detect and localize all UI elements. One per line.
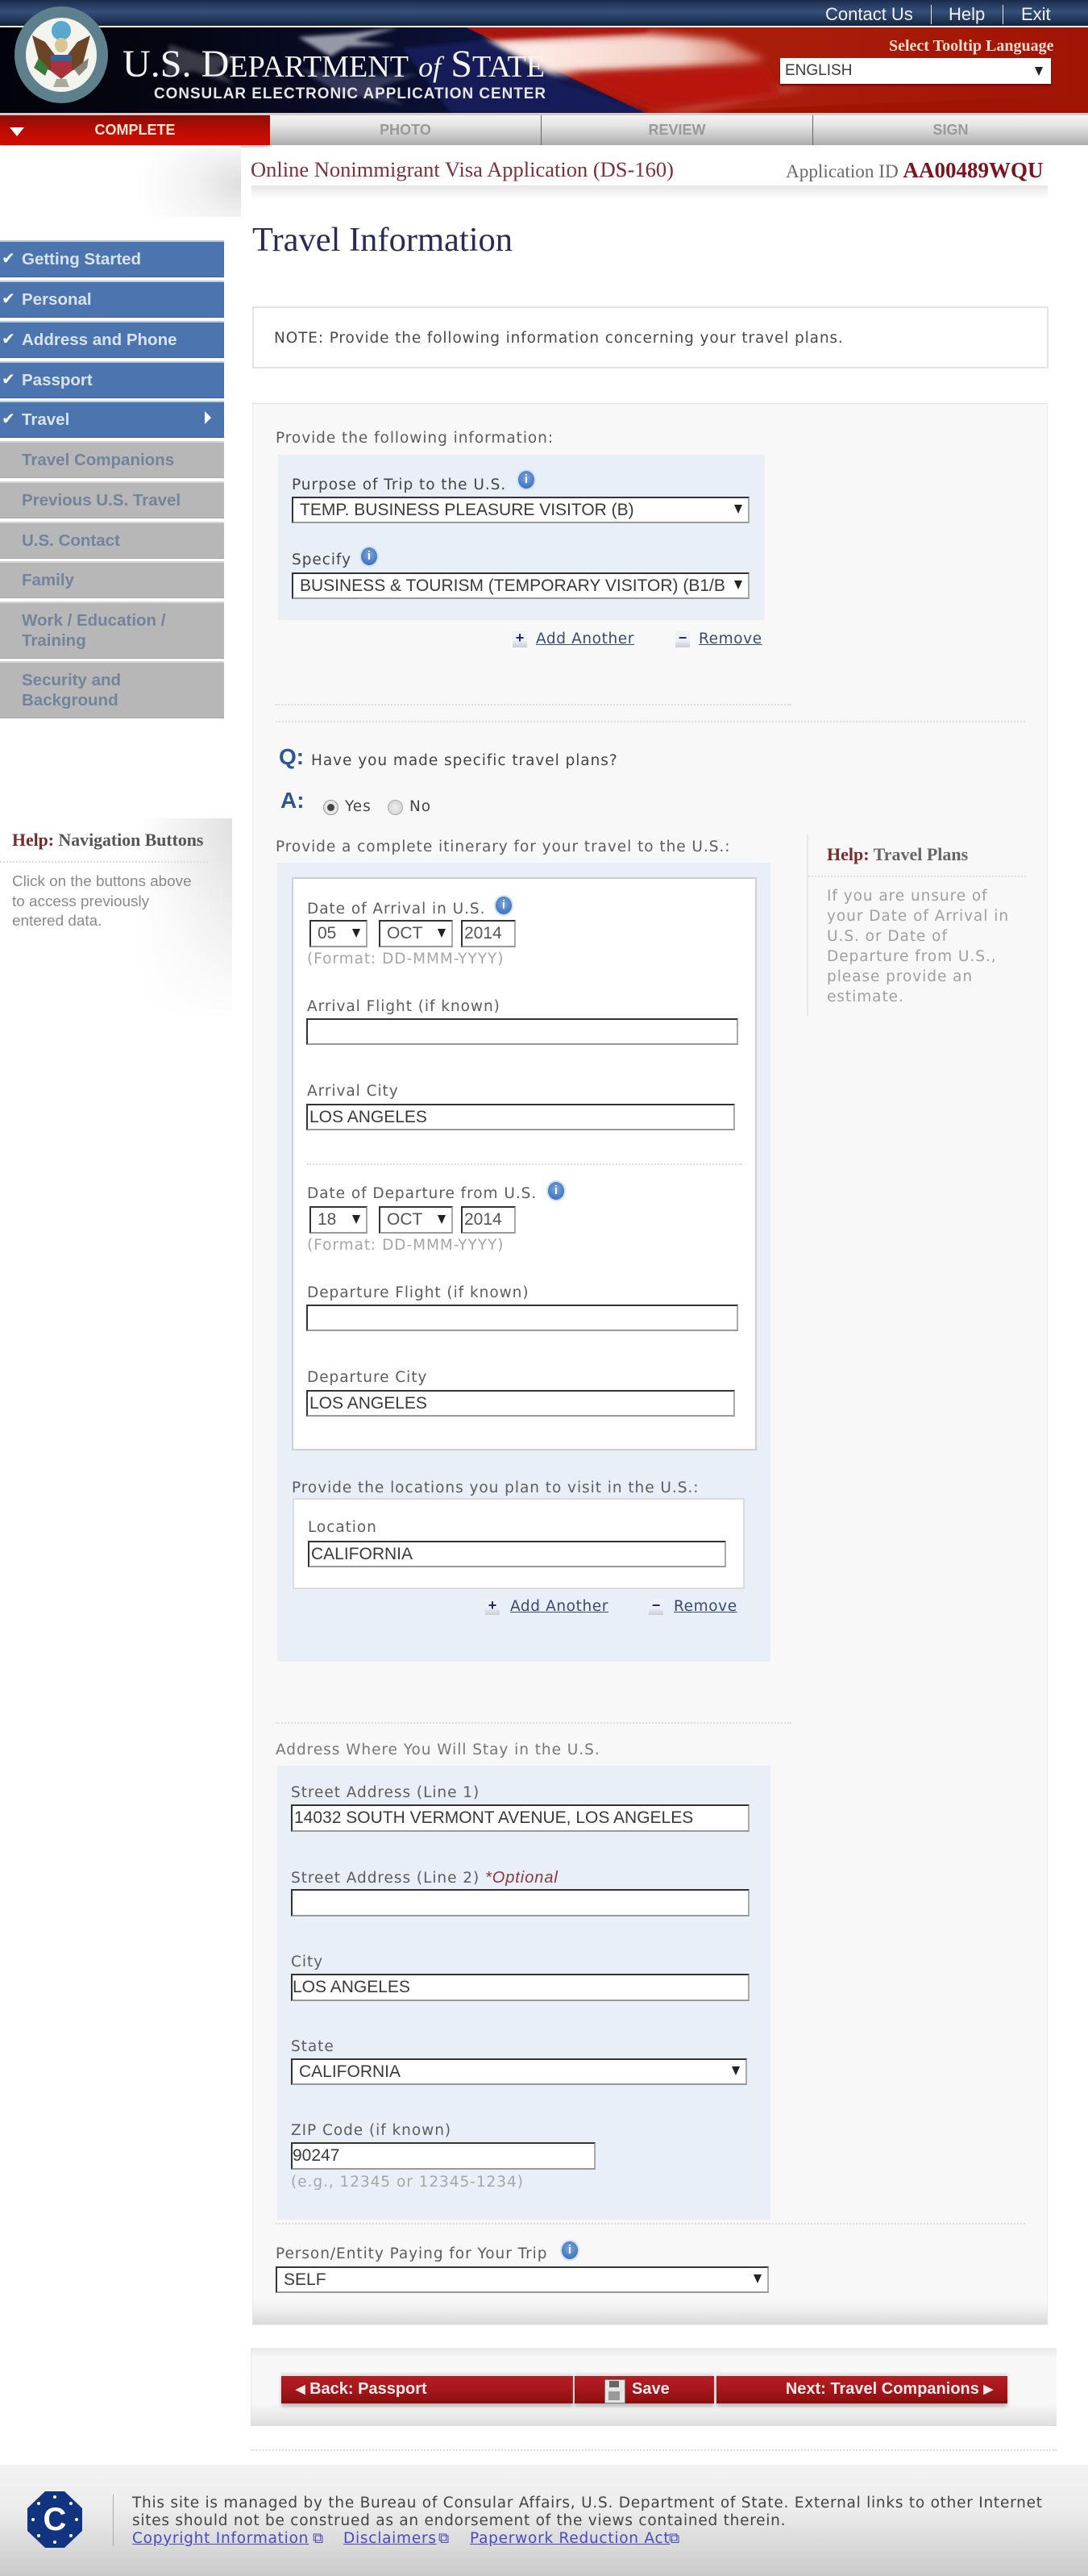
top links: Contact Us: [825, 4, 913, 24]
tab: sign: SIGN: [932, 122, 969, 138]
language dropdown: ENGLISH: [785, 62, 852, 79]
departure date label: Date of Departure from U.S.: [307, 1185, 537, 1202]
footer links: ⧉: [669, 2530, 680, 2547]
arrival year: [461, 920, 516, 947]
label: itinerary: Provide a complete itinerary for your travel to the U.S.:: [276, 839, 730, 855]
location input: CALIFORNIA: [311, 1545, 413, 1563]
purpose select: TEMP. BUSINESS PLEASURE VISITOR (B): [300, 501, 634, 519]
help text: [12, 873, 192, 930]
help text: Click on the buttons above: [12, 873, 192, 890]
top links: Help: [949, 4, 985, 24]
help text: your Date of Arrival in: [827, 908, 1009, 925]
help panel: travel plans: [807, 834, 1026, 1016]
arrival year: 2014: [464, 924, 502, 943]
nav: previous travel: Previous U.S. Travel: [22, 491, 181, 510]
nav: security: Background: [22, 691, 118, 710]
nav: work education: Work / Education /: [22, 611, 165, 630]
arrival month: OCT: [387, 924, 422, 943]
help text: U.S. or Date of: [827, 928, 948, 945]
a mark: A:: [280, 788, 305, 813]
button: next: Next: Travel Companions ▶: [786, 2380, 993, 2398]
arrival flight input: [306, 1018, 738, 1045]
help text: estimate.: [827, 988, 904, 1005]
purpose select: [292, 497, 750, 523]
nav: personal: Personal: [22, 290, 92, 309]
departure year: 2014: [464, 1210, 502, 1229]
arrival city input: [306, 1104, 735, 1130]
group: itinerary: [277, 863, 770, 1662]
title: U.S. Department of State: CONSULAR ELECTRONIC APPLICATION CENTER: [154, 85, 546, 102]
tab: complete: [0, 115, 270, 145]
answer: [280, 788, 431, 815]
date format hint: (Format: DD-MMM-YYYY): [307, 1237, 504, 1254]
label: locations: Provide the locations you plan to visit in the U.S.:: [292, 1479, 699, 1496]
header divider band: [251, 185, 1048, 199]
footer: [0, 2465, 1088, 2576]
card: travel dates and flights: [292, 877, 757, 1450]
nav: travel: [0, 401, 224, 438]
add link: Add Another: [510, 1598, 608, 1615]
arrival day: 05: [318, 924, 336, 943]
footer links: ⧉: [438, 2530, 450, 2547]
nav: security: Security and: [22, 671, 121, 689]
street 2 label: Street Address (Line 2) *Optional: [291, 1869, 559, 1887]
street 1 input: 14032 SOUTH VERMONT AVENUE, LOS ANGELES: [294, 1808, 693, 1827]
state select: CALIFORNIA: [299, 2062, 401, 2081]
title: U.S. Department of State: U.S. DEPARTMENT of STATE: [123, 43, 545, 85]
nav: personal: ✔: [2, 289, 15, 308]
tab: review: REVIEW: [648, 122, 706, 138]
info icon: [517, 469, 536, 490]
minus icon: [675, 631, 690, 647]
nav: security: [0, 661, 224, 718]
tab: photo: PHOTO: [380, 122, 431, 138]
button: back: ◀ Back: Passport: [296, 2380, 427, 2398]
specify select: BUSINESS & TOURISM (TEMPORARY VISITOR) (B1/B: [300, 576, 725, 595]
remove link: Remove: [699, 630, 762, 647]
top links: Exit: [1021, 4, 1051, 24]
footer links: Disclaimers: [343, 2530, 437, 2547]
no label: No: [409, 798, 431, 815]
city label: City: [291, 1954, 323, 1970]
nav: getting started: Getting Started: [22, 250, 141, 268]
location input: [308, 1541, 726, 1567]
plus icon: [513, 631, 527, 647]
footer links: Paperwork Reduction Act: [470, 2530, 670, 2547]
street 1 label: Street Address (Line 1): [291, 1784, 480, 1801]
paying select: SELF: [284, 2270, 326, 2289]
arrival city label: Arrival City: [307, 1083, 399, 1100]
q mark: Q:: [279, 744, 304, 769]
minus icon: [649, 1599, 663, 1615]
nav: previous travel: [0, 481, 224, 518]
nav: travel: Travel: [22, 410, 69, 429]
nav: family: [0, 561, 224, 598]
date format hint: (Format: DD-MMM-YYYY): [307, 951, 504, 968]
radio yes: [323, 800, 338, 815]
label: address: Address Where You Will Stay in the U.S.: [276, 1742, 600, 1758]
state label: State: [291, 2038, 334, 2055]
departure day: 18: [318, 1210, 336, 1229]
info icon: i: [568, 2243, 571, 2257]
group: address: [277, 1766, 770, 2220]
note box: [252, 306, 1049, 368]
tab: sign: [813, 115, 1088, 145]
language dropdown: [780, 58, 1051, 84]
zip hint: (e.g., 12345 or 12345-1234): [291, 2174, 524, 2191]
help panel: navigation buttons: [0, 818, 232, 1097]
footer links: ⧉: [313, 2530, 324, 2547]
specify label: Specify: [292, 551, 351, 568]
departure day: [309, 1206, 368, 1234]
plus icon: +: [488, 1597, 496, 1613]
info icon: i: [368, 549, 371, 563]
form panel: [252, 403, 1048, 2325]
help heading: Help: Navigation Buttons: [12, 830, 203, 850]
tab: photo: [270, 115, 542, 145]
help text: [827, 888, 1009, 1005]
nav: passport: ✔: [2, 369, 15, 389]
page heading: Travel Information: [252, 221, 513, 259]
nav: address and phone: Address and Phone: [22, 331, 177, 349]
tab: review: [542, 115, 813, 145]
arrival flight label: Arrival Flight (if known): [307, 998, 500, 1015]
info icon: [359, 546, 379, 567]
departure month: [379, 1206, 453, 1234]
footer text: sites should not be construed as an endorsement of the views contained therein.: [132, 2512, 786, 2529]
departure city label: Departure City: [307, 1369, 427, 1386]
button: save: Save: [632, 2380, 670, 2398]
question text: Have you made specific travel plans?: [311, 752, 618, 769]
application id: Application ID AA00489WQU: [786, 158, 1044, 182]
add another: purpose: [513, 630, 762, 647]
zip label: ZIP Code (if known): [291, 2122, 451, 2139]
footer links: [132, 2530, 680, 2547]
corner shade: [0, 146, 241, 217]
card: location: [293, 1498, 745, 1589]
location label: Location: [308, 1519, 377, 1536]
top links: [825, 4, 1051, 24]
nav: us contact: U.S. Contact: [22, 531, 120, 550]
nav: passport: Passport: [22, 371, 93, 389]
departure year: [461, 1206, 516, 1234]
button: next: [716, 2376, 1007, 2403]
help text: please provide an: [827, 968, 973, 985]
question: [279, 744, 618, 769]
city input: LOS ANGELES: [293, 1978, 410, 1996]
purpose label: Purpose of Trip to the U.S.: [292, 476, 506, 493]
city input: [291, 1974, 750, 2001]
button: save: [575, 2376, 714, 2403]
nav: work education: Training: [22, 631, 86, 650]
label: provide information: Provide the following information:: [276, 430, 554, 447]
nav: travel companions: [0, 441, 224, 478]
button: back: [281, 2376, 573, 2403]
yes label: Yes: [345, 798, 372, 815]
nav: getting started: ✔: [2, 248, 15, 268]
nav: work education: [0, 601, 224, 659]
minus icon: −: [679, 630, 687, 646]
icon: consular seal: C: [44, 2502, 66, 2537]
info icon: i: [525, 472, 528, 486]
departure city input: LOS ANGELES: [309, 1394, 427, 1413]
info icon: i: [502, 898, 505, 912]
icon: consular seal: [27, 2491, 82, 2548]
help text: entered data.: [12, 913, 102, 930]
departure city input: [306, 1390, 735, 1417]
nav: address and phone: ✔: [2, 329, 15, 348]
add link: Add Another: [536, 630, 634, 647]
departure flight label: Departure Flight (if known): [307, 1284, 529, 1301]
nav: address and phone: [0, 321, 224, 358]
help text: Departure from U.S.,: [827, 948, 997, 965]
info icon: i: [554, 1184, 558, 1197]
arrival date label: Date of Arrival in U.S.: [307, 901, 485, 918]
icon: floppy: [604, 2379, 625, 2403]
label: paying person: Person/Entity Paying for Your Trip: [276, 2245, 547, 2262]
paying select: [276, 2266, 769, 2293]
nav: personal: [0, 281, 224, 318]
footer links: Copyright Information: [132, 2530, 309, 2547]
tooltip language label: Select Tooltip Language: [889, 37, 1053, 55]
help text: to access previously: [12, 893, 149, 910]
footer text: This site is managed by the Bureau of Consular Affairs, U.S. Department of State. External links to other Internet: [132, 2495, 1043, 2511]
tab: complete: COMPLETE: [94, 122, 176, 138]
departure flight input: [306, 1305, 738, 1331]
nav: travel companions: Travel Companions: [22, 451, 174, 469]
departure month: OCT: [387, 1210, 422, 1229]
nav: getting started: [0, 240, 224, 277]
button panel: [251, 2348, 1057, 2426]
info icon: [494, 895, 513, 916]
note text: NOTE: Provide the following information concerning your travel plans.: [274, 330, 844, 347]
info icon: [560, 2240, 579, 2261]
help title: Help: Travel Plans: [827, 844, 968, 864]
nav: us contact: [0, 522, 224, 559]
zip input: 90247: [293, 2146, 339, 2165]
side navigation: [0, 240, 224, 718]
minus icon: −: [652, 1597, 660, 1613]
footer text: [132, 2495, 1043, 2529]
state select: [291, 2058, 747, 2085]
info icon: [546, 1180, 566, 1201]
heading: application title: Online Nonimmigrant Visa Application (DS-160): [251, 157, 674, 181]
help text: If you are unsure of: [827, 888, 988, 905]
specify select: [292, 572, 750, 599]
arrival day: [309, 920, 368, 947]
nav: travel: ✔: [2, 409, 15, 428]
seal: Department of State: [15, 6, 108, 103]
zip input: [291, 2142, 596, 2170]
street 1 input: [291, 1804, 750, 1832]
nav: passport: [0, 361, 224, 398]
add another: locations: [485, 1597, 737, 1615]
nav: family: Family: [22, 571, 74, 589]
street 2 input: [291, 1889, 750, 1916]
arrival city input: LOS ANGELES: [309, 1108, 427, 1126]
remove link: Remove: [674, 1598, 737, 1615]
header banner: [0, 0, 1088, 115]
plus icon: [485, 1599, 500, 1615]
group: purpose of trip: [278, 455, 765, 620]
arrival month: [379, 920, 453, 947]
radio no: [388, 800, 403, 815]
plus icon: +: [516, 630, 524, 646]
